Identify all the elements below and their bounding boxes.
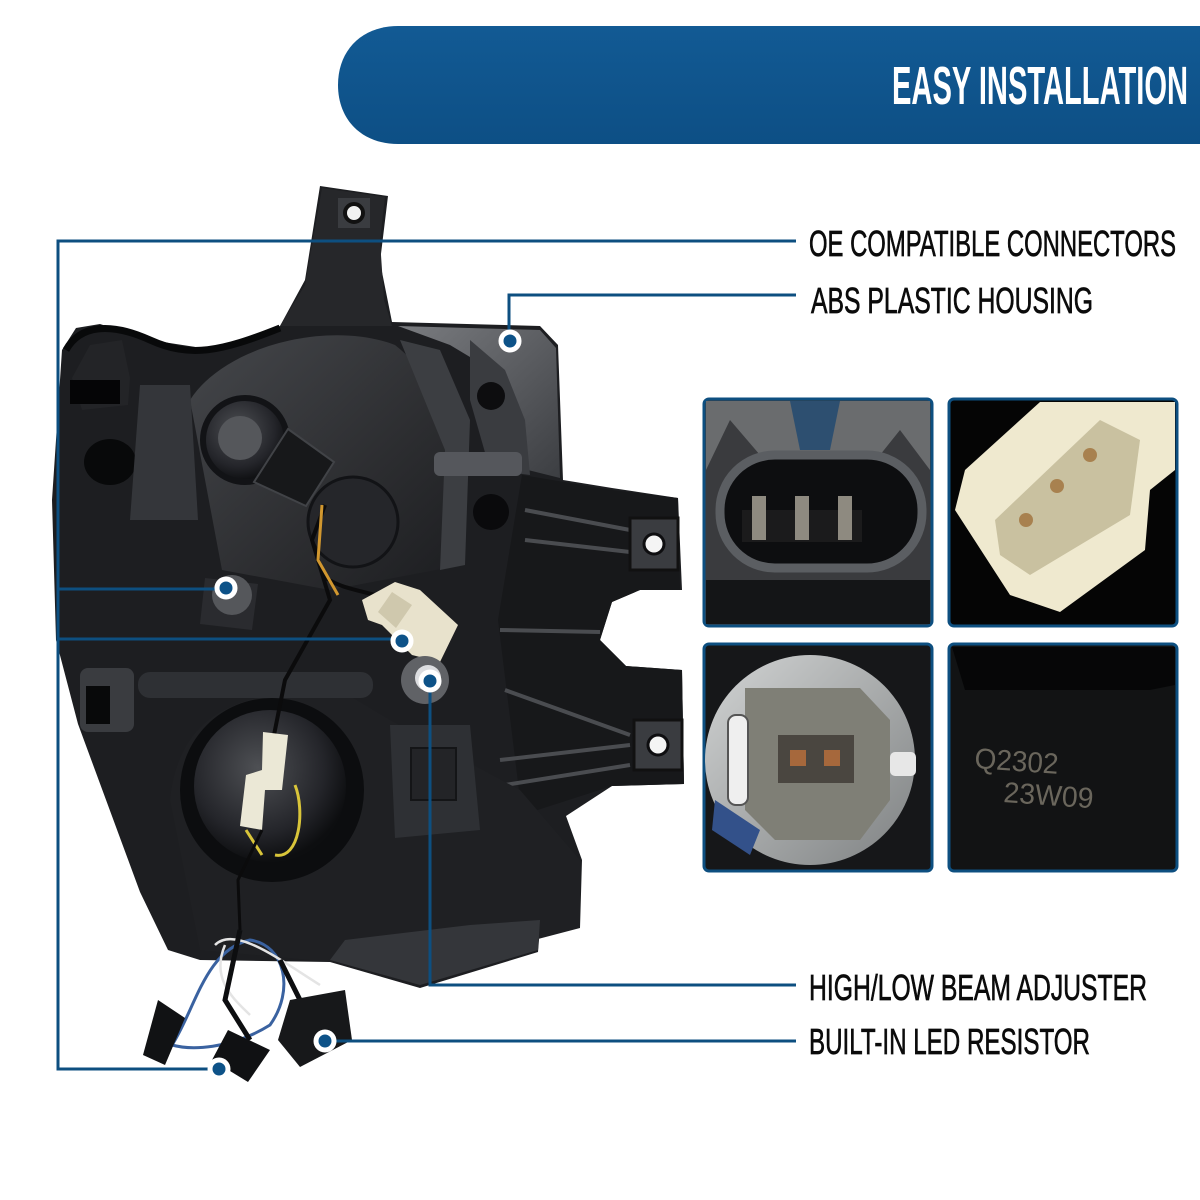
- bracket hole top: [630, 518, 678, 570]
- photo panel: white connector: [949, 399, 1177, 626]
- header banner: [338, 26, 1200, 144]
- photo panel: resistor stamp: 23W09: [1003, 777, 1095, 815]
- adjuster post: [200, 578, 258, 630]
- adjuster screw: [401, 656, 449, 704]
- photo panel: resistor stamp: [949, 644, 1177, 871]
- photo panel: resistor stamp: Q2302: [974, 743, 1060, 781]
- wiring harness: [143, 930, 352, 1082]
- left hole: [84, 439, 136, 485]
- side bracket: [498, 475, 684, 815]
- left connector: [80, 668, 134, 732]
- left horizontal tube: [138, 672, 373, 698]
- low beam bowl: [180, 698, 364, 882]
- marker dots: [210, 332, 519, 1078]
- bracket hole bottom: [634, 720, 682, 770]
- bottom step: [330, 920, 540, 985]
- round cap: [308, 477, 398, 567]
- leader lines: [58, 241, 796, 1069]
- labels: [809, 223, 1176, 1062]
- upper connector plug: [254, 429, 334, 506]
- outer wire loop: [66, 328, 280, 350]
- white connector: [362, 582, 458, 662]
- small holes: [473, 494, 509, 530]
- lens rim: [398, 326, 560, 478]
- harness plug middle: [212, 1030, 270, 1082]
- photo panel: dark connector: [704, 399, 932, 626]
- resistor box: [278, 990, 352, 1067]
- harness plug left: [143, 1000, 185, 1065]
- wires and connector: [272, 505, 390, 745]
- housing rear outline: [52, 186, 684, 988]
- upper-left connector: [72, 340, 130, 410]
- photo panel: grey connector: [704, 644, 932, 871]
- headlight housing: [52, 186, 684, 988]
- low beam connector and wire: [240, 732, 288, 830]
- top mount tab: [280, 188, 392, 326]
- lower section: [170, 690, 580, 970]
- upper bulb dome: [190, 335, 463, 590]
